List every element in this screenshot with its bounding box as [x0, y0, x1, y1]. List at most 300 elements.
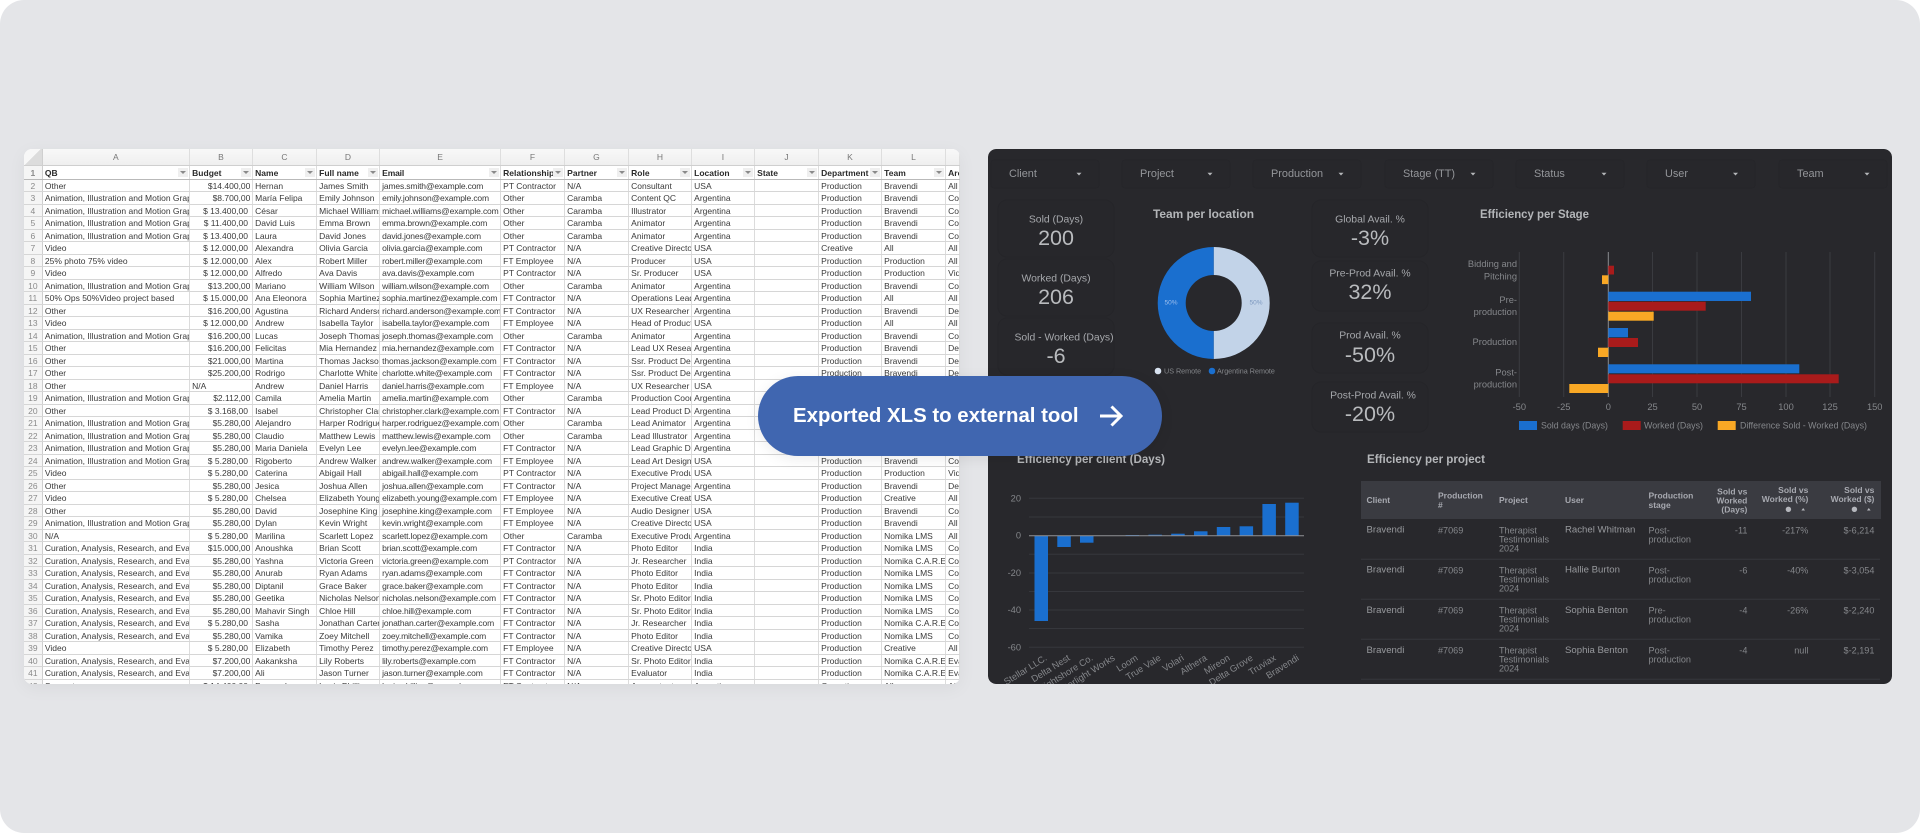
spreadsheet data rows: ryan.adams@example.com	[382, 568, 482, 578]
spreadsheet data rows: USA	[694, 518, 712, 528]
spreadsheet data rows: N/A	[567, 343, 581, 353]
spreadsheet data rows: Yashna	[255, 556, 283, 566]
spreadsheet data rows: 4	[30, 206, 35, 216]
spreadsheet data rows: 2	[30, 181, 35, 191]
spreadsheet data rows: $5.280,00	[213, 443, 250, 453]
bar chart: efficiency per client: 0	[1016, 531, 1021, 541]
table row: Hallie Burton: Therapist	[1499, 566, 1537, 576]
spreadsheet data rows: $5.280,00	[213, 631, 250, 641]
scorecard: sold minus worked	[998, 318, 1114, 375]
table header: (Days)	[1721, 505, 1748, 515]
spreadsheet data rows: Production	[821, 656, 862, 666]
table header: Production	[1438, 491, 1483, 501]
spreadsheet data rows: Bravendi	[884, 418, 918, 428]
spreadsheet data rows: $2.112,00	[213, 393, 250, 403]
spreadsheet data rows: Alejandro	[255, 418, 291, 428]
spreadsheet data rows: Production	[821, 406, 862, 416]
table header: #	[1438, 500, 1443, 510]
table header: stage	[1648, 500, 1671, 510]
spreadsheet data rows: Production	[821, 231, 862, 241]
spreadsheet data rows: USA	[694, 381, 712, 391]
spreadsheet data rows: FT Contractor	[503, 631, 555, 641]
spreadsheet data rows: Caramba	[567, 531, 602, 541]
spreadsheet data rows: Photo Editor	[631, 543, 678, 553]
spreadsheet data rows: robert.miller@example.com	[382, 256, 482, 266]
spreadsheet data rows: All	[884, 243, 894, 253]
table row: Rachel Whitman: Post-	[1648, 526, 1670, 536]
spreadsheet data rows: FT Contractor	[503, 618, 555, 628]
bar chart: efficiency per stage: Difference Sold - Worked (Days)	[1740, 420, 1867, 430]
spreadsheet data rows: 36	[28, 606, 38, 616]
spreadsheet data rows: $ 5.280,00	[208, 643, 248, 653]
spreadsheet data rows: $25.200,00	[208, 368, 250, 378]
spreadsheet data rows: Elizabeth	[255, 643, 290, 653]
bar chart: efficiency per client: Mireon	[1202, 653, 1232, 676]
spreadsheet data rows: Argentina	[694, 193, 731, 203]
spreadsheet data rows: Production	[821, 206, 862, 216]
dropdown filters: Team	[1797, 168, 1824, 180]
scorecard: sold days: Sold (Days)	[1029, 214, 1083, 226]
spreadsheet data rows: charlotte.white@example.com	[382, 368, 492, 378]
spreadsheet data rows: FT Contractor	[503, 581, 555, 591]
bar chart: efficiency per stage: -50	[1513, 402, 1526, 412]
spreadsheet data rows: Project Manager	[631, 481, 692, 491]
spreadsheet data rows: amelia.martin@example.com	[382, 393, 489, 403]
spreadsheet data rows: All	[948, 531, 958, 541]
spreadsheet data rows: Andrew	[255, 318, 284, 328]
bar chart: efficiency per client: Loom	[1115, 653, 1140, 674]
spreadsheet data rows: Sr. Photo Editor	[631, 606, 691, 616]
spreadsheet data rows: $ 5.280,00	[208, 456, 248, 466]
table row: Sophia Benton pre-production: 2024	[1499, 624, 1519, 634]
spreadsheet data rows: Argentina	[694, 431, 731, 441]
spreadsheet data rows: Video	[45, 243, 66, 253]
column header row	[24, 166, 960, 180]
scorecard: global availability: -3%	[1351, 226, 1389, 250]
spreadsheet data rows: 10	[28, 281, 38, 291]
spreadsheet data rows: Nomika LMS	[884, 631, 933, 641]
table row: Sophia Benton post-production: Bravendi	[1366, 645, 1404, 656]
spreadsheet data rows: UX Researcher	[631, 381, 689, 391]
table row: Sophia Benton post-production: -4	[1739, 646, 1747, 656]
spreadsheet data rows: Ryan Adams	[319, 568, 367, 578]
spreadsheet data rows: N/A	[567, 518, 581, 528]
spreadsheet data rows: William Wilson	[319, 281, 374, 291]
spreadsheet data rows: 20	[28, 406, 38, 416]
bar chart: efficiency per client: Truviax	[1247, 653, 1278, 677]
table row: Sophia Benton pre-production: Testimonials	[1499, 615, 1549, 625]
donut chart: team per location	[1153, 207, 1275, 376]
spreadsheet data rows: 8	[30, 256, 35, 266]
spreadsheet data rows: Production	[821, 356, 862, 366]
table row: Hallie Burton: Testimonials	[1499, 575, 1549, 585]
spreadsheet data rows: Other	[45, 368, 66, 378]
spreadsheet data rows: N/A	[45, 531, 59, 541]
spreadsheet data rows: PT Contractor	[503, 181, 556, 191]
spreadsheet data rows: 29	[28, 518, 38, 528]
bar chart: efficiency per stage: Sold days (Days)	[1541, 420, 1608, 430]
column header row: Full name	[319, 168, 359, 178]
scorecard: post-production availability: -20%	[1345, 402, 1395, 426]
spreadsheet data rows: 23	[28, 443, 38, 453]
table row: Rachel Whitman: Bravendi	[1366, 524, 1404, 536]
spreadsheet data rows: Bravendi	[884, 481, 918, 491]
spreadsheet data rows: Bravendi	[884, 306, 918, 316]
spreadsheet data rows: $5.280,00	[213, 481, 250, 491]
spreadsheet data rows: $ 15.000,00	[203, 293, 248, 303]
spreadsheet data rows: 14	[28, 331, 38, 341]
spreadsheet data rows: $7.200,00	[213, 668, 250, 678]
spreadsheet data rows: Victoria Green	[319, 556, 373, 566]
spreadsheet data rows: Production	[821, 456, 862, 466]
spreadsheet data rows: Production	[821, 568, 862, 578]
spreadsheet data rows: N/A	[567, 243, 581, 253]
bar chart: efficiency per stage: 125	[1822, 402, 1838, 412]
spreadsheet data rows: Argentina	[694, 531, 731, 541]
spreadsheet data rows: Other	[45, 506, 66, 516]
spreadsheet data rows: Alfredo	[255, 268, 282, 278]
spreadsheet data rows: India	[694, 593, 713, 603]
spreadsheet data rows: Sr. Producer	[631, 268, 678, 278]
spreadsheet data rows: $5.280,00	[213, 431, 250, 441]
spreadsheet data rows: jason.turner@example.com	[382, 668, 483, 678]
spreadsheet data rows: richard.anderson@example.com	[382, 306, 501, 316]
spreadsheet data rows: Laura	[255, 231, 277, 241]
spreadsheet data rows: Bravendi	[884, 193, 918, 203]
table row: Rachel Whitman: production	[1648, 535, 1691, 545]
spreadsheet data rows: Vamika	[255, 631, 283, 641]
column letters	[24, 149, 960, 166]
spreadsheet data rows: Jr. Researcher	[631, 618, 686, 628]
scorecard: sold days	[998, 200, 1114, 257]
spreadsheet data rows: Production	[821, 268, 862, 278]
spreadsheet data rows: 28	[28, 506, 38, 516]
spreadsheet data rows: Jr. Researcher	[631, 556, 686, 566]
spreadsheet data rows: Argentina	[694, 406, 731, 416]
bar chart: efficiency per client: Bravendi	[1264, 653, 1301, 681]
spreadsheet data rows: 37	[28, 618, 38, 628]
column header row: Relationship	[503, 168, 554, 178]
spreadsheet data rows: India	[694, 581, 713, 591]
dropdown filters: User	[1665, 168, 1688, 180]
spreadsheet data rows: $8.700,00	[213, 193, 250, 203]
spreadsheet data rows: Anoushka	[255, 543, 293, 553]
spreadsheet data rows: Bravendi	[884, 406, 918, 416]
spreadsheet data rows: N/A	[567, 456, 581, 466]
scorecard: sold minus worked: Sold - Worked (Days)	[1014, 332, 1114, 344]
spreadsheet data rows: All	[948, 318, 958, 328]
spreadsheet data rows: Lead Animator	[631, 418, 686, 428]
spreadsheet data rows: Isabel	[255, 406, 278, 416]
spreadsheet data rows: USA	[694, 243, 712, 253]
spreadsheet data rows: Emma Brown	[319, 218, 370, 228]
spreadsheet data rows: 33	[28, 568, 38, 578]
spreadsheet data rows: Camila	[255, 393, 282, 403]
spreadsheet data rows: N/A	[567, 381, 581, 391]
bar chart: efficiency per client: True Vale	[1124, 653, 1163, 682]
spreadsheet data rows: Lucas	[255, 331, 278, 341]
spreadsheet data rows: grace.baker@example.com	[382, 581, 483, 591]
table row: Hallie Burton: -6	[1739, 565, 1747, 575]
spreadsheet data rows: Andrew Walker	[319, 456, 376, 466]
spreadsheet data rows: N/A	[567, 443, 581, 453]
spreadsheet data rows: All	[884, 318, 894, 328]
callout label: Exported XLS to external tool	[793, 405, 1079, 427]
spreadsheet data rows: Production	[821, 181, 862, 191]
spreadsheet data rows: N/A	[567, 268, 581, 278]
spreadsheet data rows: $13.200,00	[208, 281, 250, 291]
table row: Sophia Benton pre-production: Pre-	[1648, 606, 1666, 616]
spreadsheet data rows: Production	[821, 368, 862, 378]
spreadsheet data rows: Other	[45, 306, 66, 316]
spreadsheet data rows: 18	[28, 381, 38, 391]
spreadsheet data rows: chloe.hill@example.com	[382, 606, 471, 616]
spreadsheet data rows: Nomika LMS	[884, 606, 933, 616]
table: efficiency per project	[1361, 452, 1881, 679]
table row: Sophia Benton post-production: Testimonials	[1499, 655, 1549, 665]
spreadsheet data rows: Other	[503, 418, 524, 428]
spreadsheet data rows: Geetika	[255, 593, 284, 603]
spreadsheet data rows: Other	[503, 531, 524, 541]
spreadsheet data rows: India	[694, 631, 713, 641]
table row: Rachel Whitman	[1366, 524, 1874, 554]
table row: Sophia Benton pre-production	[1366, 605, 1874, 634]
bar chart: efficiency per client: Delta Nest	[1030, 653, 1072, 684]
spreadsheet data rows: FT Contractor	[503, 606, 555, 616]
spreadsheet data rows: josephine.king@example.com	[382, 506, 492, 516]
spreadsheet data rows: $7.200,00	[213, 656, 250, 666]
spreadsheet data rows: 5	[30, 218, 35, 228]
bar chart: efficiency per stage: Pitching	[1484, 272, 1517, 282]
spreadsheet data rows: N/A	[567, 356, 581, 366]
spreadsheet data rows: harper.rodriguez@example.com	[382, 418, 499, 428]
spreadsheet data rows: N/A	[567, 481, 581, 491]
spreadsheet data rows: Caramba	[567, 431, 602, 441]
spreadsheet data rows: N/A	[567, 468, 581, 478]
spreadsheet data rows: Nomika C.A.R.E	[884, 656, 946, 666]
spreadsheet data rows: Production	[821, 643, 862, 653]
spreadsheet data rows: Production	[821, 331, 862, 341]
spreadsheet data rows: N/A	[567, 568, 581, 578]
spreadsheet data rows: Production	[821, 593, 862, 603]
table row: Sophia Benton post-production: null	[1794, 646, 1808, 656]
spreadsheet data rows: 27	[28, 493, 38, 503]
spreadsheet data rows: Argentina	[694, 418, 731, 428]
spreadsheet data rows: $ 5.280,00	[208, 618, 248, 628]
spreadsheet data rows: emma.brown@example.com	[382, 218, 487, 228]
table row: Rachel Whitman: -11	[1735, 525, 1747, 535]
spreadsheet data rows: david.jones@example.com	[382, 231, 481, 241]
spreadsheet data rows: 25% photo 75% video	[45, 256, 128, 266]
spreadsheet data rows: India	[694, 543, 713, 553]
spreadsheet data rows: Argentina	[694, 368, 731, 378]
spreadsheet data rows: Video	[45, 643, 66, 653]
spreadsheet data rows: N/A	[567, 181, 581, 191]
spreadsheet data rows: Argentina	[694, 331, 731, 341]
spreadsheet data rows: Bravendi	[884, 443, 918, 453]
spreadsheet data rows: Other	[45, 381, 66, 391]
table header: Worked ($)	[1831, 494, 1875, 504]
donut chart: team per location: Argentina Remote	[1217, 366, 1275, 376]
spreadsheet data rows: Chloe Hill	[319, 606, 356, 616]
spreadsheet data rows: Other	[45, 356, 66, 366]
dropdown filters	[991, 160, 1887, 188]
table header: Worked	[1716, 495, 1747, 505]
spreadsheet data rows: Production	[884, 468, 925, 478]
spreadsheet data rows: All	[948, 181, 958, 191]
spreadsheet data rows: Brian Scott	[319, 543, 361, 553]
spreadsheet data rows: Production	[821, 393, 862, 403]
spreadsheet data rows: Bravendi	[884, 343, 918, 353]
spreadsheet data rows: USA	[694, 318, 712, 328]
spreadsheet data rows: Robert Miller	[319, 256, 367, 266]
column header row: Role	[631, 168, 650, 178]
spreadsheet data rows: Bravendi	[884, 518, 918, 528]
table row: Sophia Benton pre-production: $-2,240	[1844, 606, 1874, 616]
spreadsheet data rows: Video	[45, 268, 66, 278]
spreadsheet data rows: N/A	[567, 543, 581, 553]
spreadsheet data rows: Caramba	[567, 231, 602, 241]
spreadsheet data rows: All	[884, 293, 894, 303]
spreadsheet data rows: N/A	[567, 606, 581, 616]
spreadsheet data rows: Caramba	[567, 331, 602, 341]
spreadsheet data rows: Production	[821, 193, 862, 203]
scorecard: pre-production availability: Pre-Prod Avail. %	[1329, 268, 1411, 280]
table header: Worked (%)	[1762, 494, 1809, 504]
spreadsheet data rows: UX Researcher	[631, 306, 689, 316]
spreadsheet data rows: FT Employee	[503, 256, 554, 266]
spreadsheet data rows: Jason Turner	[319, 668, 369, 678]
bar chart: efficiency per client: -60	[1008, 642, 1021, 652]
spreadsheet data rows: christopher.clark@example.com	[382, 406, 499, 416]
spreadsheet data rows: FT Contractor	[503, 443, 555, 453]
spreadsheet data rows: Nomika LMS	[884, 568, 933, 578]
spreadsheet data rows: Other	[45, 343, 66, 353]
spreadsheet data rows: Audio Designer	[631, 506, 689, 516]
bar chart: efficiency per stage: 100	[1778, 402, 1794, 412]
bar chart: efficiency per stage: Pre-	[1499, 295, 1517, 305]
spreadsheet data rows: mia.hernandez@example.com	[382, 343, 494, 353]
donut chart: team per location: US Remote	[1164, 366, 1201, 376]
spreadsheet data rows: Caramba	[567, 218, 602, 228]
bar chart: efficiency per stage: 25	[1647, 402, 1658, 412]
spreadsheet data rows: Head of Product	[631, 318, 692, 328]
spreadsheet data rows: Other	[45, 181, 66, 191]
column header row: Department	[821, 168, 868, 178]
spreadsheet data rows: victoria.green@example.com	[382, 556, 488, 566]
bar chart: efficiency per client: Althera	[1178, 652, 1209, 677]
spreadsheet data rows: Production	[821, 543, 862, 553]
spreadsheet data rows: FT Employee	[503, 506, 554, 516]
spreadsheet data rows: Argentina	[694, 206, 731, 216]
table row: Hallie Burton	[1366, 564, 1874, 594]
spreadsheet data rows: Other	[503, 281, 524, 291]
spreadsheet data rows: Argentina	[694, 306, 731, 316]
spreadsheet data rows: emily.johnson@example.com	[382, 193, 489, 203]
spreadsheet data rows: N/A	[567, 406, 581, 416]
spreadsheet data rows: william.wilson@example.com	[382, 281, 489, 291]
spreadsheet data rows: $5.280,00	[213, 518, 250, 528]
spreadsheet data rows: Lead Illustrator	[631, 431, 687, 441]
spreadsheet data rows: FT Contractor	[503, 306, 555, 316]
spreadsheet data rows: Photo Editor	[631, 568, 678, 578]
spreadsheet data rows: Production	[821, 506, 862, 516]
spreadsheet data rows: Bravendi	[884, 206, 918, 216]
spreadsheet data rows: thomas.jackson@example.com	[382, 356, 497, 366]
scorecard: pre-production availability: 32%	[1348, 280, 1392, 304]
spreadsheet data rows: FT Employee	[503, 493, 554, 503]
spreadsheet data rows: Production	[821, 531, 862, 541]
spreadsheet data rows: 12	[28, 306, 38, 316]
spreadsheet data rows: Caramba	[567, 206, 602, 216]
spreadsheet data rows: 25	[28, 468, 38, 478]
spreadsheet data rows: Lily Roberts	[319, 656, 364, 666]
table row: Sophia Benton pre-production: Sophia Benton	[1565, 605, 1628, 616]
spreadsheet data rows: 34	[28, 581, 38, 591]
column letters: K	[847, 152, 853, 162]
table row: Sophia Benton pre-production: -4	[1739, 606, 1747, 616]
spreadsheet data rows: César	[255, 206, 278, 216]
spreadsheet data rows: $ 5.280,00	[208, 531, 248, 541]
column header row: QB	[45, 168, 58, 178]
spreadsheet data rows: sophia.martinez@example.com	[382, 293, 497, 303]
spreadsheet data rows: N/A	[567, 306, 581, 316]
table header: Project	[1499, 495, 1528, 505]
dropdown filters: Production	[1271, 168, 1323, 180]
bar chart: efficiency per client: -40	[1008, 605, 1021, 615]
spreadsheet data rows: timothy.perez@example.com	[382, 643, 488, 653]
spreadsheet data rows: $ 5.280,00	[208, 468, 248, 478]
spreadsheet data rows: India	[694, 668, 713, 678]
spreadsheet data rows: USA	[694, 468, 712, 478]
scorecard: sold minus worked: -6	[1046, 344, 1066, 368]
spreadsheet data rows: Other	[503, 206, 524, 216]
spreadsheet data rows: Other	[503, 431, 524, 441]
spreadsheet data rows: FT Contractor	[503, 368, 555, 378]
spreadsheet data rows: 19	[28, 393, 38, 403]
spreadsheet data rows: Production	[884, 256, 925, 266]
spreadsheet data rows: Joseph Thomas	[319, 331, 380, 341]
spreadsheet data rows: Emily Johnson	[319, 193, 374, 203]
spreadsheet data rows: Nomika C.A.R.E	[884, 556, 946, 566]
column letters: J	[784, 152, 789, 162]
spreadsheet data rows: Bravendi	[884, 331, 918, 341]
bar chart: efficiency per stage: production	[1474, 307, 1517, 317]
table row: Sophia Benton post-production: #7069	[1438, 646, 1463, 656]
spreadsheet data rows: $5.280,00	[213, 593, 250, 603]
bar chart: efficiency per stage: Production	[1473, 337, 1517, 347]
spreadsheet data rows: Argentina	[694, 443, 731, 453]
spreadsheet data rows: Production	[821, 281, 862, 291]
spreadsheet data rows: Marilina	[255, 531, 285, 541]
spreadsheet data rows: N/A	[567, 618, 581, 628]
table row: Hallie Burton: Post-	[1648, 566, 1670, 576]
spreadsheet data rows: Evelyn Lee	[319, 443, 361, 453]
column letters: D	[345, 152, 351, 162]
spreadsheet data rows: USA	[694, 493, 712, 503]
spreadsheet data rows: 26	[28, 481, 38, 491]
table row: Sophia Benton post-production: $-2,191	[1844, 646, 1874, 656]
table row: Hallie Burton: $-3,054	[1844, 565, 1874, 575]
column letters: H	[657, 152, 663, 162]
spreadsheet data rows: ava.davis@example.com	[382, 268, 474, 278]
table row: Hallie Burton: -40%	[1787, 565, 1808, 575]
column letters: L	[911, 152, 916, 162]
spreadsheet data rows: Bravendi	[884, 218, 918, 228]
spreadsheet data rows: kevin.wright@example.com	[382, 518, 483, 528]
spreadsheet data rows: Production	[821, 631, 862, 641]
spreadsheet data rows: All	[948, 243, 958, 253]
